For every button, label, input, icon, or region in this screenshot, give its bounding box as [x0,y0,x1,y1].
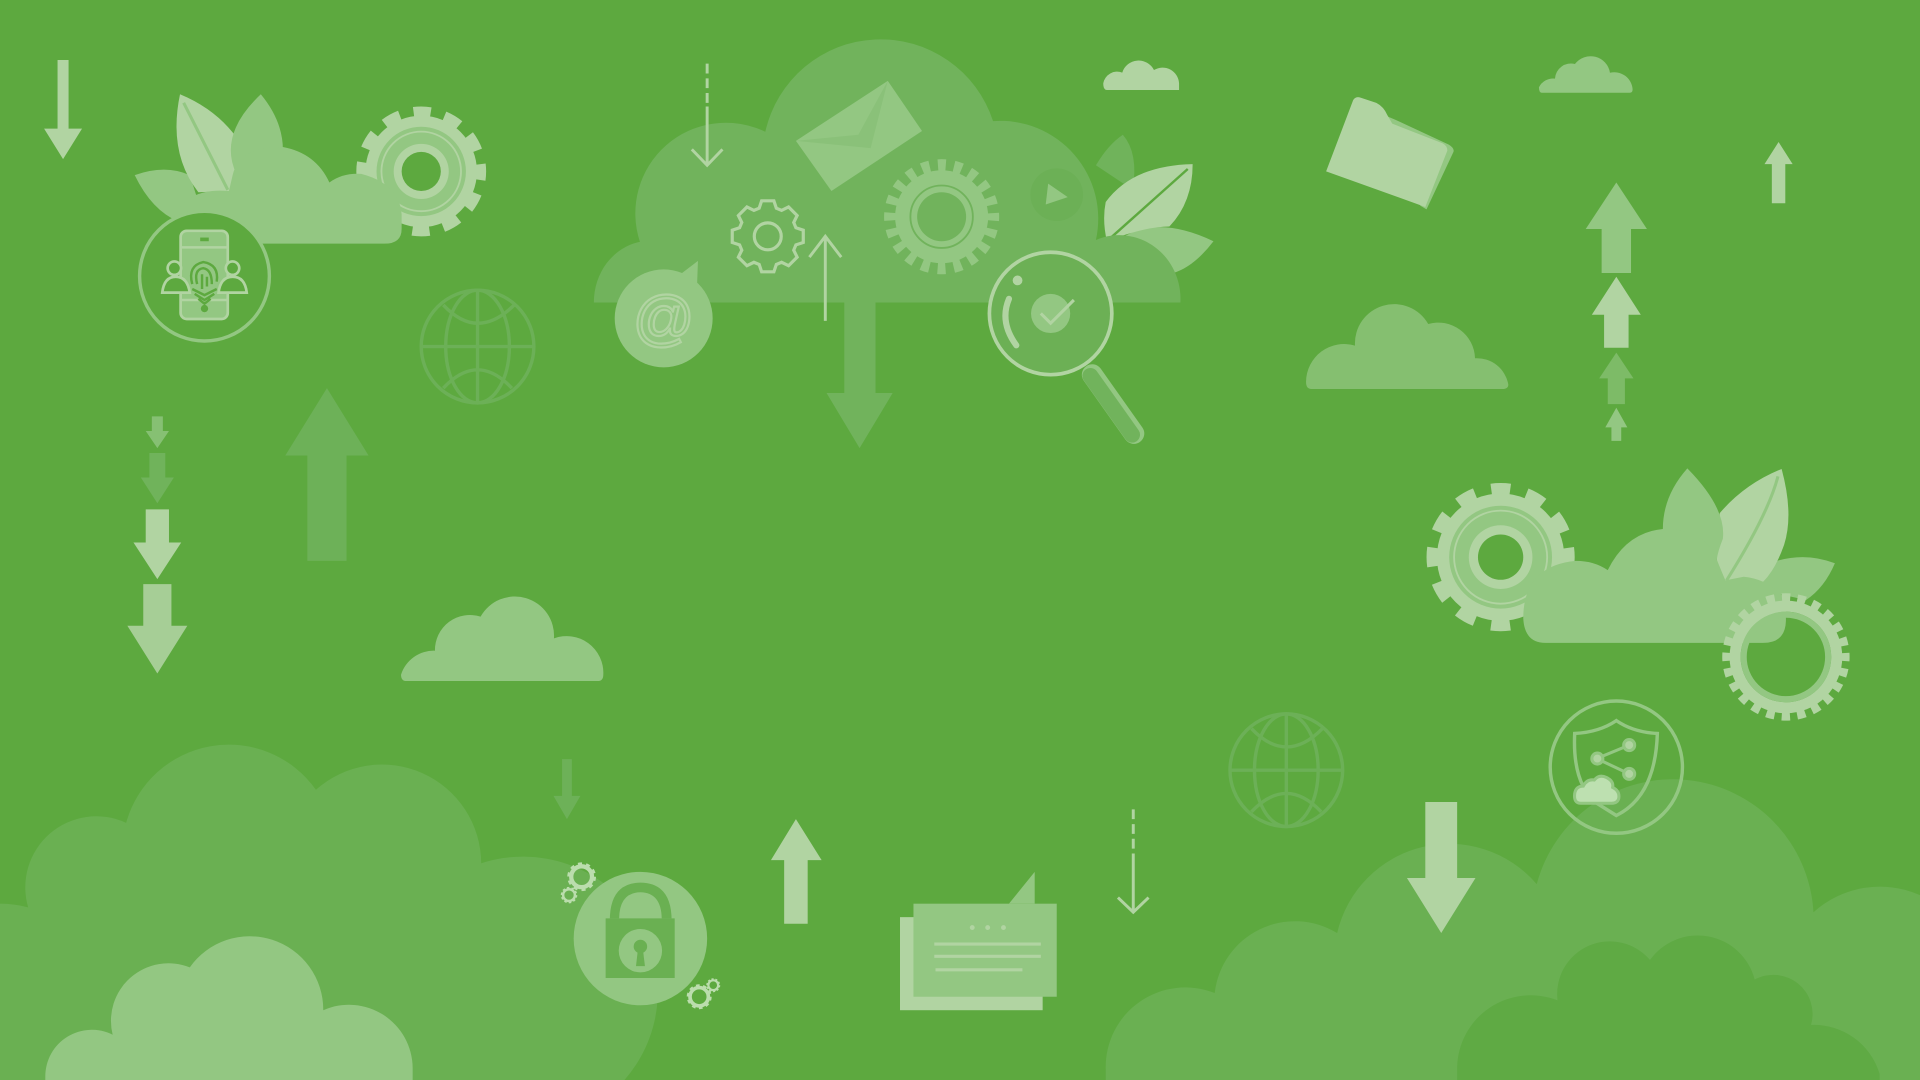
icon: outline gear [732,201,803,272]
small cloud top [1103,61,1179,90]
arrow: top-left down [44,60,82,159]
icon: globe left [421,290,534,403]
arrow: dashed down bottom [1118,809,1149,912]
icon: shield circle [1550,701,1682,833]
icon: phone fingerprint circle [140,211,269,341]
icon: folder [1326,97,1454,209]
icon: at-sign bubble [615,261,713,367]
right gear large [1433,489,1569,625]
icon: padlock circle [574,872,707,1005]
icon: globe right [1230,714,1343,827]
mid leaf right of top cloud [1120,227,1213,273]
arrow stack: up right [1586,182,1647,441]
icon: chat bubble [900,872,1057,1010]
icon: play circle [1030,168,1083,221]
small gears by padlock [562,864,719,1008]
top-left cloud with leaves [135,94,402,244]
cloud: right middle [1306,304,1508,389]
right gear ring [1727,598,1845,716]
light leaf right of top cloud [1104,164,1193,241]
arrow stack: down left [127,416,187,673]
cloud: centre-left [401,596,603,681]
right cloud with leaves [1523,468,1835,643]
icon: magnifier [989,252,1134,435]
bottom-left small cloud [45,936,413,1080]
arrow: big down bottom right [1407,802,1476,933]
arrow: up bottom centre [771,819,822,924]
small cloud top right [1539,56,1633,93]
icon: at-sign bubble: @ [633,284,695,352]
arrow: small down faint [553,759,580,819]
arrow: big up faint [285,388,369,561]
bottom-right large cloud [1106,779,1920,1080]
bottom-left large cloud [0,745,658,1080]
top-left gear [362,112,481,231]
top centre big cloud [594,39,1181,448]
arrow: small up top right [1764,142,1793,203]
bottom-right inner cloud [1457,935,1880,1080]
centre gear [890,165,993,268]
icon: envelope [796,81,922,191]
arrow: thin up [809,236,841,321]
arrow: dashed down [692,64,722,165]
faint leaf behind top cloud [1096,135,1134,190]
